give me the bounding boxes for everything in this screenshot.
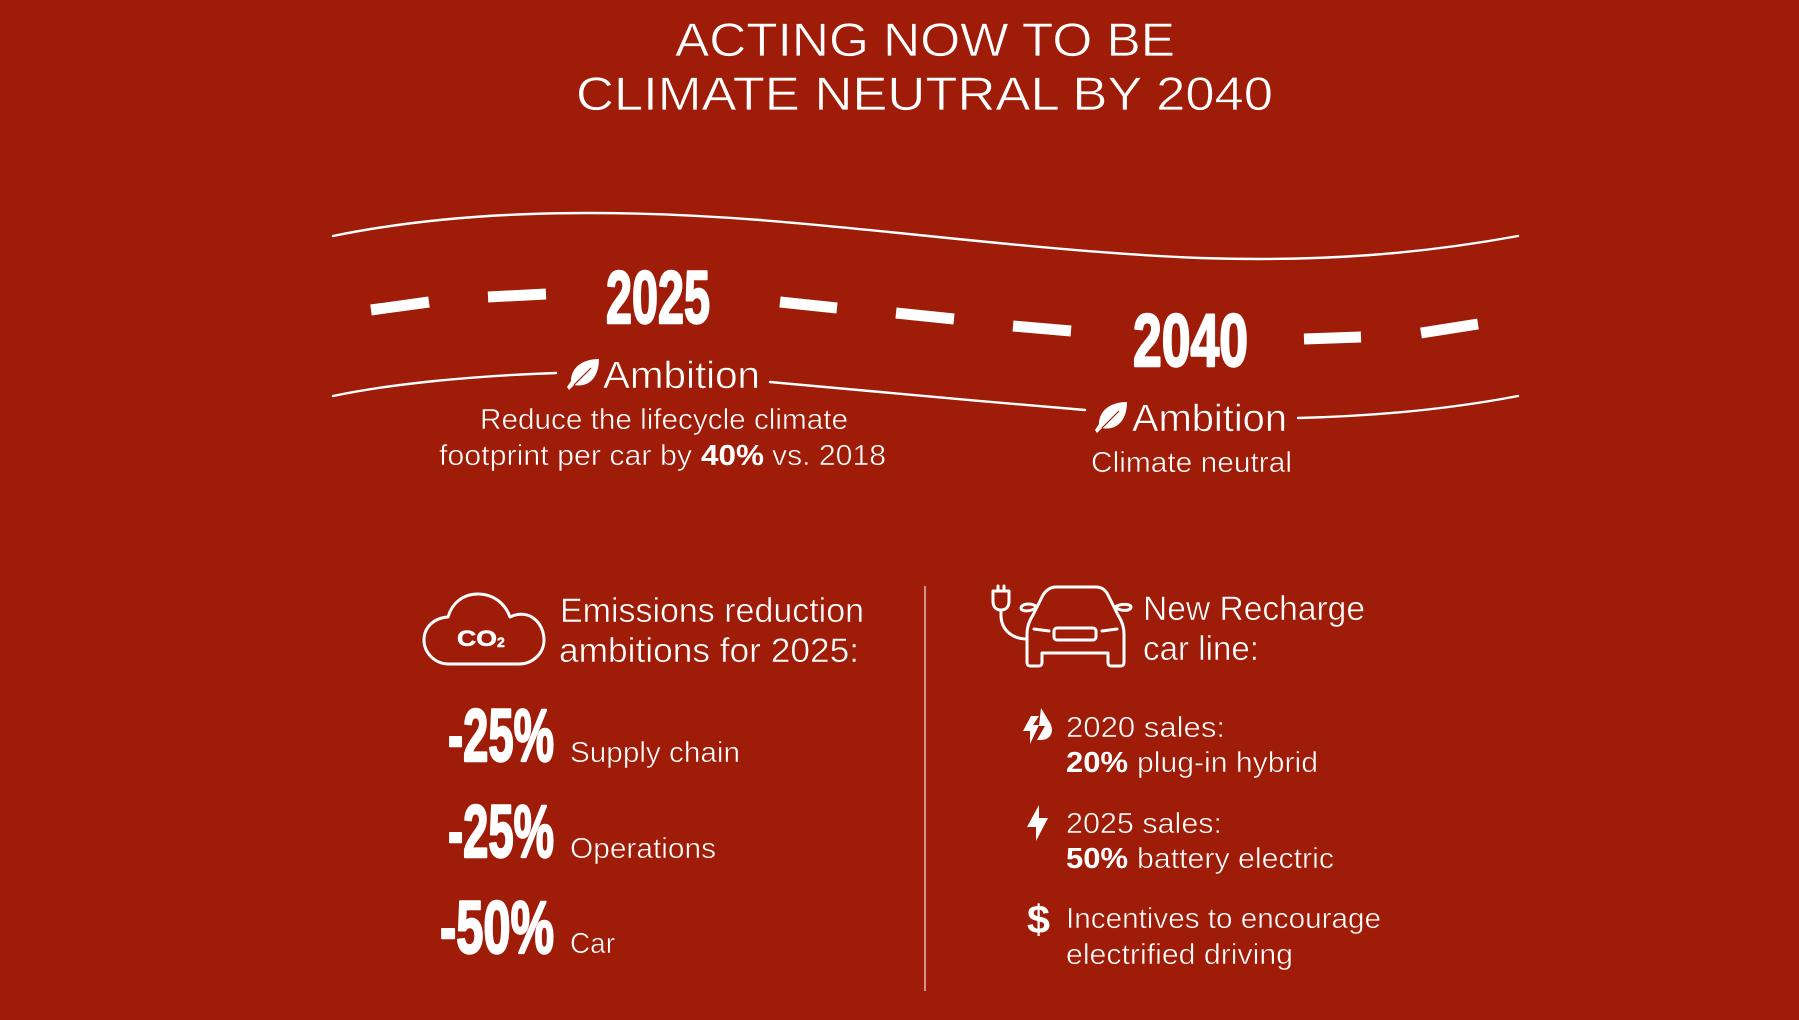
ambition description [439,404,886,472]
item: 2025 sales: 2025 sales: [1066,808,1222,840]
milestone 2025 [439,256,886,472]
panel heading: ambitions for 2025: [559,632,859,670]
ambition description: vs. 2018 [772,440,886,472]
panel heading [559,592,864,670]
icon: dollar sign: $ [1027,898,1050,942]
panel: emissions reduction [424,592,864,969]
ambition description: 40% [701,440,764,472]
stat: supply chain: -25% [448,694,554,777]
road timeline [333,213,1518,418]
ambition description: Climate neutral [1091,447,1292,479]
ambition description: footprint per car by [439,440,693,472]
title: CLIMATE NEUTRAL BY 2040 [576,67,1273,120]
item: 2025 sales [1027,805,1334,875]
road centre dashes [371,294,1478,339]
stat: operations: Operations [570,833,716,865]
item: incentives: Incentives to encourage [1066,903,1381,935]
ambition heading: Ambition [1132,398,1287,440]
icon: hybrid bolt and drop [1023,708,1052,744]
year 2025: 2025 [606,256,710,339]
year 2040: 2040 [1133,299,1248,382]
stat: car: Car [570,928,615,960]
ambition description: Reduce the lifecycle climate [480,404,848,436]
stat: supply chain: Supply chain [570,737,740,769]
title [576,13,1273,120]
panel heading: New Recharge [1143,590,1365,628]
icon: electric car with plug [993,586,1131,666]
ambition heading: Ambition [603,355,760,397]
road bottom edge [333,373,1518,418]
road top edge [333,213,1518,259]
item: 2020 sales [1023,708,1318,779]
icon: CO2 cloud: CO [457,626,497,651]
panel heading: Emissions reduction [560,592,864,630]
item: 2020 sales: 2020 sales: [1066,712,1225,744]
stat: car: -50% [440,886,554,969]
icon: lightning bolt [1027,805,1048,841]
item: incentives: electrified driving [1066,939,1293,971]
stat: supply chain [448,694,740,777]
title: ACTING NOW TO BE [675,13,1175,66]
stat: operations [448,790,716,873]
icon: CO2 cloud: 2 [497,634,505,650]
panel: recharge car line [993,586,1381,971]
item: 2020 sales: 20% [1066,747,1128,779]
milestone 2040 [1091,299,1292,479]
icon: leaf [1095,402,1127,433]
item: 2025 sales: 50% [1066,843,1128,875]
icon: leaf [567,359,599,390]
panel heading: car line: [1143,630,1259,668]
item: 2025 sales: battery electric [1137,843,1334,875]
panel heading [1143,590,1365,668]
icon: CO2 cloud [424,594,544,664]
stat: operations: -25% [448,790,554,873]
item: incentives [1027,898,1381,971]
item: 2020 sales: plug-in hybrid [1137,747,1318,779]
